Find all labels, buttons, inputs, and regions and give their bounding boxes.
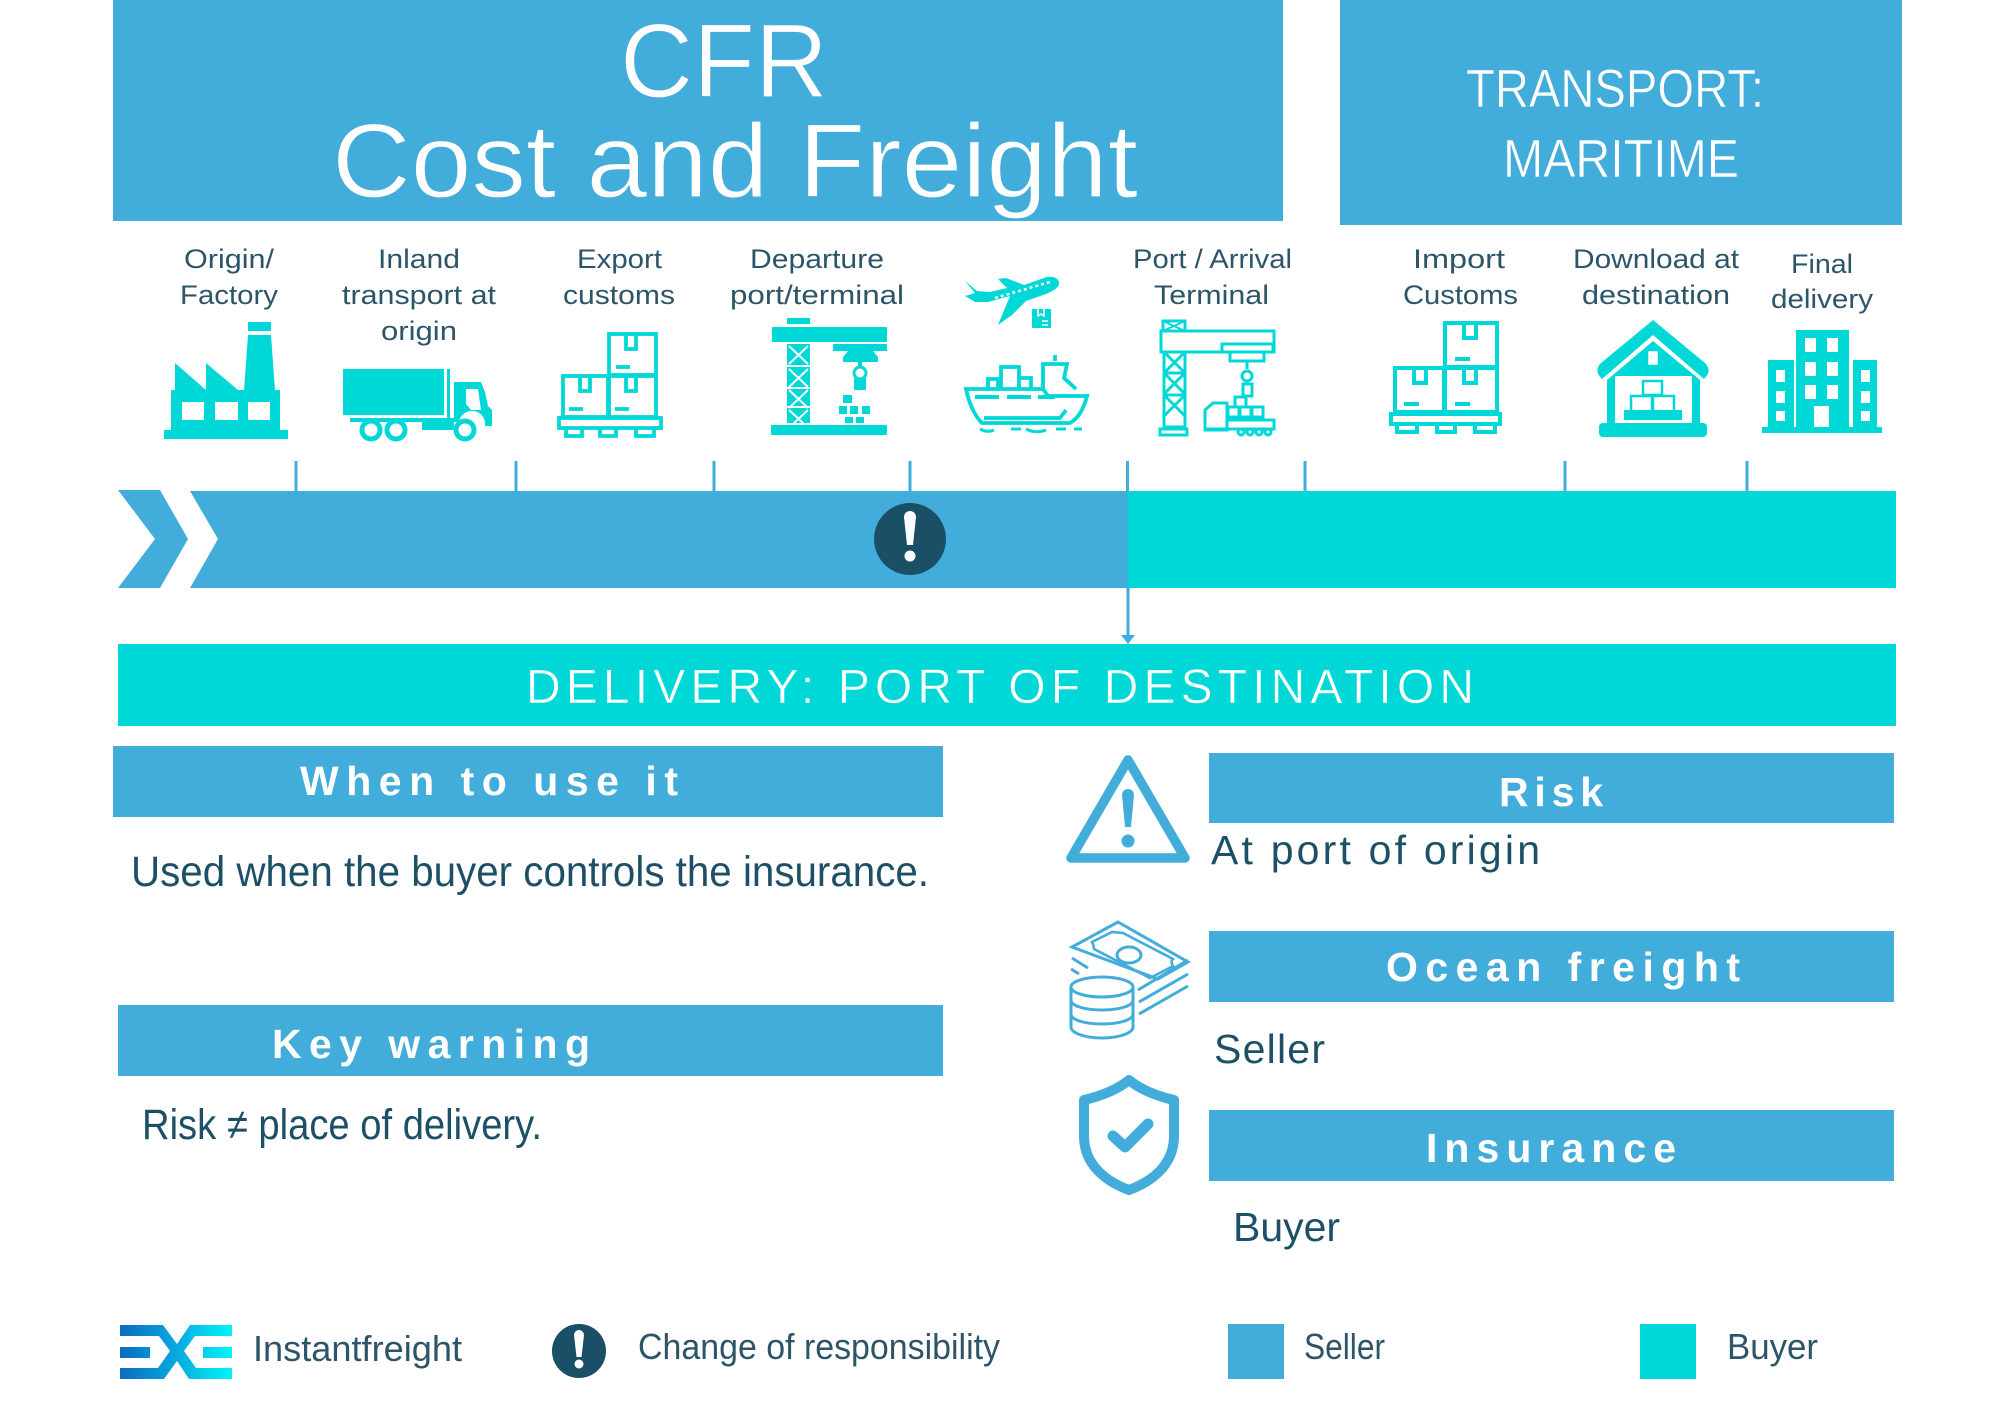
legend: instantfreight: Instantfreight: [253, 1328, 462, 1369]
legend: buyer: Buyer: [1727, 1326, 1818, 1367]
icon: warehouse: [1597, 320, 1709, 437]
step label: origin factory: Factory: [180, 280, 279, 310]
text: key warning: Risk ≠ place of delivery.: [142, 1101, 542, 1149]
step label: final delivery: delivery: [1771, 284, 1874, 314]
icon: office building: [1762, 330, 1882, 433]
step label: download: [1573, 244, 1740, 310]
legend: seller: [1228, 1324, 1385, 1379]
title panel: [113, 0, 1283, 221]
heading: key warning: Key warning: [272, 1021, 590, 1067]
legend: buyer: [1640, 1324, 1818, 1379]
step label: inland transport: origin: [381, 316, 457, 346]
transport panel: TRANSPORT:: [1466, 59, 1764, 119]
step label: departure port: Departure: [750, 244, 884, 274]
timeline ticks: [296, 461, 1747, 491]
icon: change of responsibility marker: [874, 503, 946, 575]
panel: ocean freight: [1209, 931, 1894, 1072]
icon: shield: [1084, 1080, 1174, 1190]
step label: origin factory: [180, 244, 279, 310]
step label: import customs: Import: [1413, 244, 1506, 274]
panel: insurance: Buyer: [1233, 1204, 1340, 1250]
legend: change of responsibility: Change of responsibility: [638, 1326, 1000, 1367]
icon: plane: [965, 277, 1059, 328]
icon: warning triangle: [1071, 760, 1185, 858]
transport panel: [1340, 0, 1902, 225]
step label: inland transport: [342, 244, 497, 346]
icon: instantfreight logo: [120, 1325, 232, 1379]
step label: final delivery: [1771, 249, 1874, 314]
legend: change of responsibility: [552, 1324, 1000, 1378]
heading: key warning: [118, 1005, 943, 1076]
text: when to use it: Used when the buyer controls the insurance.: [131, 848, 929, 896]
legend: seller: Seller: [1304, 1326, 1385, 1367]
panel: risk: Risk: [1499, 769, 1603, 815]
icon: export boxes: [559, 334, 661, 436]
icon: money and coins: [1071, 922, 1188, 1038]
title panel: CFR: [620, 3, 828, 120]
heading: when to use it: [113, 746, 943, 817]
panel: insurance: Insurance: [1426, 1125, 1676, 1171]
step label: export customs: [563, 244, 675, 310]
icon: arrival crane: [1160, 321, 1274, 435]
step label: arrival terminal: [1133, 244, 1292, 310]
step label: arrival terminal: Terminal: [1154, 280, 1269, 310]
step label: download: destination: [1582, 280, 1730, 310]
delivery banner: [118, 644, 1896, 726]
heading: when to use it: When to use it: [300, 758, 678, 804]
icon: import boxes: [1391, 323, 1500, 432]
step label: final delivery: Final: [1791, 249, 1853, 279]
step label: export customs: Export: [577, 244, 663, 274]
panel: risk: [1209, 753, 1894, 873]
transport panel: MARITIME: [1503, 129, 1739, 189]
step label: import customs: Customs: [1403, 280, 1518, 310]
step label: download: Download at: [1573, 244, 1740, 274]
step label: inland transport: transport at: [342, 280, 497, 310]
step label: origin factory: Origin/: [184, 244, 275, 274]
timeline bar: buyer segment: [1128, 491, 1896, 588]
icon: truck: [343, 369, 492, 439]
title panel: Cost and Freight: [332, 103, 1138, 220]
panel: ocean freight: Seller: [1214, 1026, 1325, 1072]
panel: risk: At port of origin: [1211, 827, 1540, 873]
step label: departure port: port/terminal: [730, 280, 904, 310]
delivery banner: DELIVERY: PORT OF DESTINATION: [526, 661, 1474, 714]
panel: insurance: [1209, 1110, 1894, 1250]
icon: factory: [164, 322, 288, 439]
arrow to delivery: [1121, 588, 1135, 644]
step label: departure port: [730, 244, 904, 310]
step label: import customs: [1403, 244, 1518, 310]
step label: export customs: customs: [563, 280, 675, 310]
step label: inland transport: Inland: [378, 244, 460, 274]
panel: ocean freight: Ocean freight: [1386, 944, 1740, 990]
timeline bar: seller segment: [118, 490, 1128, 588]
step label: arrival terminal: Port / Arrival: [1133, 244, 1292, 274]
icon: ship: [966, 355, 1087, 432]
icon: departure crane: [771, 318, 887, 435]
